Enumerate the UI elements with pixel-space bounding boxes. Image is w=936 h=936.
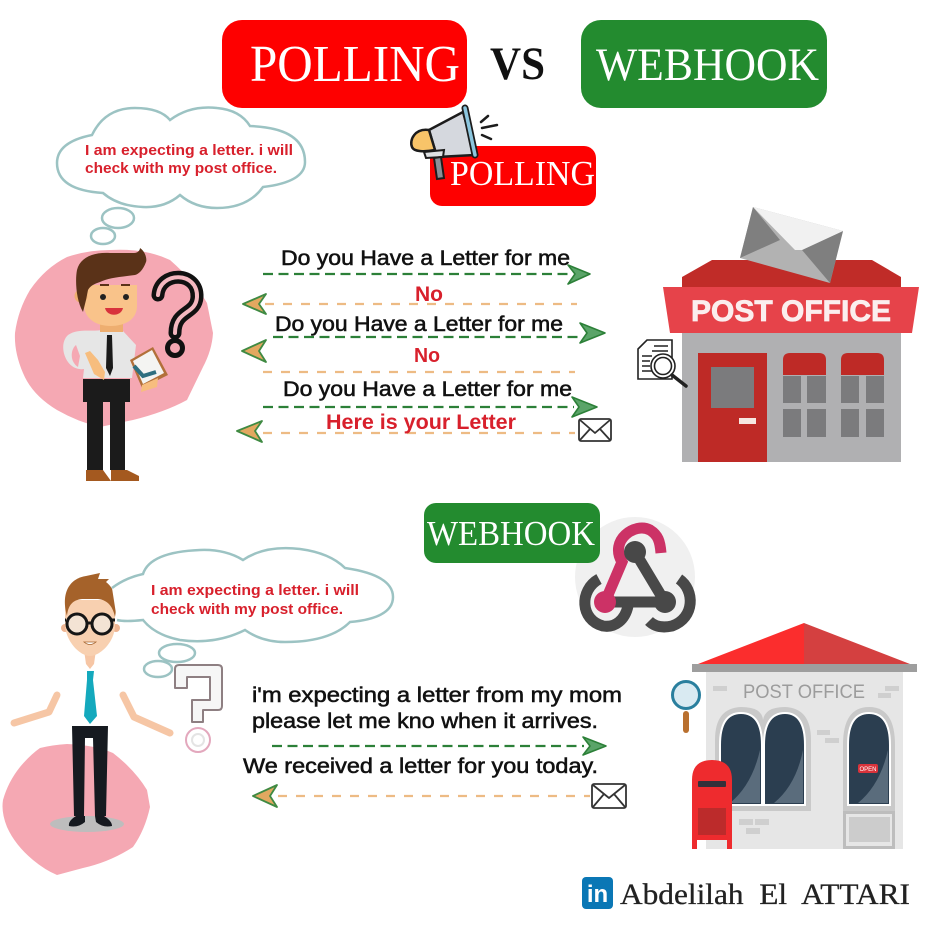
pink blob xyxy=(15,250,213,427)
bubble text: check with my post office. xyxy=(151,601,343,618)
arched window: OPEN xyxy=(859,767,877,773)
pink blob xyxy=(2,744,150,875)
registration text: i'm expecting a letter from my mom xyxy=(252,684,622,707)
ear xyxy=(74,290,88,302)
glasses xyxy=(65,614,115,634)
polling label xyxy=(430,146,596,206)
icon: linkedin: in xyxy=(587,881,608,908)
man with clipboard xyxy=(15,248,213,481)
registration text: please let me kno when it arrives. xyxy=(252,710,598,733)
face features xyxy=(100,285,130,315)
sign text: POST OFFICE xyxy=(743,682,865,703)
head xyxy=(65,600,115,656)
hair xyxy=(76,248,146,312)
request 3: Do you Have a Letter for me xyxy=(283,378,572,401)
polling section heading xyxy=(411,108,596,206)
shoes xyxy=(86,470,139,481)
reply no 2 xyxy=(242,340,575,372)
hair xyxy=(65,573,116,617)
icon: megaphone xyxy=(411,108,497,179)
building xyxy=(706,672,903,849)
bubble text xyxy=(151,582,359,618)
post office: polling xyxy=(638,207,919,462)
banner sign: POST OFFICE xyxy=(691,295,891,328)
title banner xyxy=(222,20,827,108)
reply with letter xyxy=(237,411,575,442)
polling label: POLLING xyxy=(450,154,595,193)
polling title pill xyxy=(222,20,467,108)
notification text: We received a letter for you today. xyxy=(243,755,598,778)
icon: magnifier xyxy=(672,682,700,733)
reply no 2: No xyxy=(414,345,440,367)
webhook label xyxy=(424,503,600,563)
webhook section heading xyxy=(424,503,695,637)
window left xyxy=(783,353,826,437)
thought bubble: webhook xyxy=(112,548,393,752)
envelope on roof xyxy=(740,207,843,283)
head xyxy=(84,285,137,326)
request 1 xyxy=(263,247,590,284)
bubble text: I am expecting a letter. i will xyxy=(85,142,293,159)
shoes xyxy=(69,816,112,826)
bubble text: I am expecting a letter. i will xyxy=(151,582,359,599)
bubble text: check with my post office. xyxy=(85,160,277,177)
icon: document search xyxy=(638,340,686,386)
sleeve gap xyxy=(72,345,80,367)
left arm xyxy=(14,695,57,723)
author name: Abdelilah El ATTARI xyxy=(620,878,910,911)
question mark xyxy=(158,277,197,356)
neck xyxy=(84,650,96,669)
hand xyxy=(141,378,158,392)
arched window xyxy=(843,707,895,811)
neck xyxy=(100,322,123,332)
smile xyxy=(84,642,96,644)
author credit xyxy=(582,877,910,911)
polling title pill: POLLING xyxy=(250,36,460,93)
webhook label: WEBHOOK xyxy=(427,514,595,553)
webhook title pill: WEBHOOK xyxy=(596,39,819,91)
double arched window xyxy=(715,707,811,811)
registration text xyxy=(252,684,622,733)
vs label: VS xyxy=(490,38,545,90)
reply with letter: Here is your Letter xyxy=(326,411,516,434)
cloud outline xyxy=(57,108,305,208)
reply no 1: No xyxy=(415,283,443,306)
request 2 xyxy=(273,313,605,343)
right arm xyxy=(123,695,170,733)
icon: linkedin xyxy=(582,877,613,909)
cloud outline xyxy=(112,548,393,642)
thought circles xyxy=(144,644,195,677)
thought bubble: polling xyxy=(57,108,305,244)
notification arrow xyxy=(253,785,590,807)
icon: webhook xyxy=(575,517,695,637)
request 1: Do you Have a Letter for me xyxy=(281,247,570,270)
trousers xyxy=(72,726,108,816)
question mark outline xyxy=(175,665,222,752)
door xyxy=(698,353,767,462)
pen hand xyxy=(85,351,105,380)
request 3 xyxy=(263,378,597,417)
roof xyxy=(692,623,917,672)
bricks xyxy=(713,686,899,834)
webhook title pill xyxy=(581,20,827,108)
trousers xyxy=(83,379,130,470)
request arrow xyxy=(272,737,606,755)
request 2: Do you Have a Letter for me xyxy=(275,313,563,336)
man with glasses xyxy=(2,573,170,875)
bubble text xyxy=(85,142,293,177)
post office: webhook xyxy=(672,623,917,849)
polling message exchange xyxy=(237,247,611,442)
roof xyxy=(682,260,901,288)
thought circles xyxy=(91,208,134,244)
clipboard xyxy=(130,347,168,388)
ears xyxy=(61,624,120,632)
window right xyxy=(841,353,884,437)
reply no 1 xyxy=(243,283,577,314)
shirt xyxy=(63,330,136,378)
lower panel xyxy=(843,811,895,849)
webhook message exchange xyxy=(243,684,626,808)
banner sign xyxy=(663,287,919,333)
tie xyxy=(84,671,97,724)
mailbox xyxy=(692,760,732,849)
building xyxy=(682,333,901,462)
tie xyxy=(106,335,113,376)
icon: envelope xyxy=(592,784,626,808)
floor shadow xyxy=(50,816,124,832)
icon: envelope xyxy=(579,419,611,441)
